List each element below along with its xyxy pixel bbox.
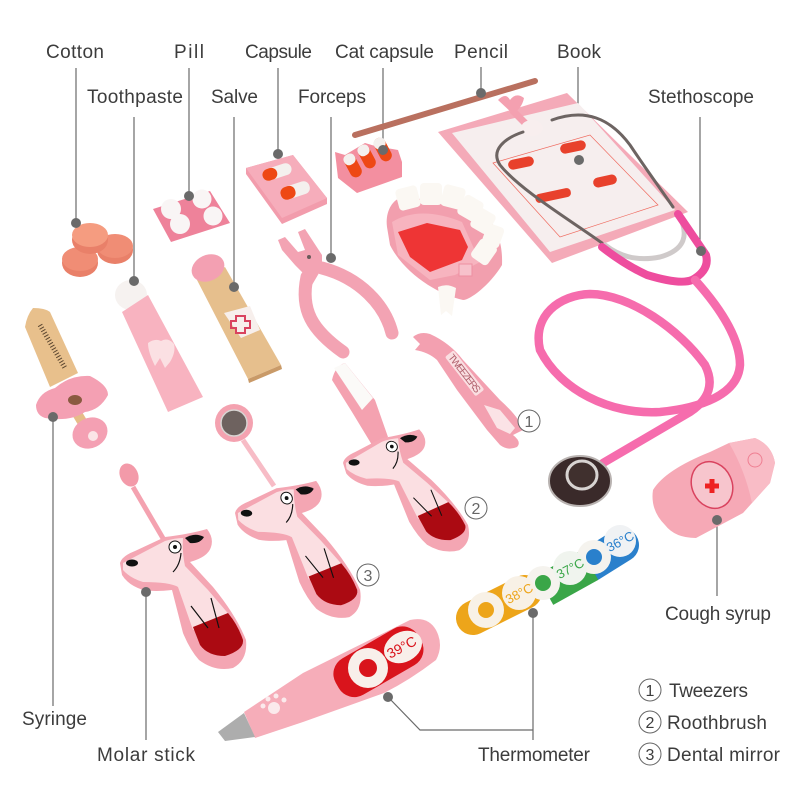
thermometer strip: 36°C (604, 528, 637, 555)
thermometer strip: 38°C (503, 580, 536, 607)
label 3 circle: 3 (364, 568, 373, 585)
forceps (278, 229, 392, 352)
syringe (25, 308, 113, 454)
label 1 circle (518, 410, 540, 432)
teeth model (387, 183, 505, 316)
label: Forceps: Forceps (298, 87, 366, 108)
thermometer: 39°C (384, 633, 419, 662)
legend: 1 (646, 683, 655, 700)
capsule (246, 155, 327, 224)
tweezers: TWEEZERS (445, 352, 483, 396)
label: Syringe: Syringe (22, 709, 87, 730)
label: Cough syrup: Cough syrup (665, 604, 771, 625)
label: Salve: Salve (211, 87, 258, 108)
label: Book: Book (557, 42, 602, 63)
label: Cotton: Cotton (46, 42, 104, 63)
legend: Tweezers (669, 681, 748, 702)
label: Capsule: Capsule (245, 42, 312, 63)
dots (48, 88, 722, 702)
legend: Roothbrush (667, 713, 767, 734)
label: Pill: Pill (174, 42, 204, 63)
thermometer strip: 37°C (554, 555, 587, 582)
stethoscope (497, 115, 740, 506)
label: Toothpaste: Toothpaste (87, 87, 183, 108)
tweezers (413, 333, 523, 449)
salve (187, 249, 282, 383)
thermometer strip (468, 525, 637, 628)
thermometer (218, 619, 440, 741)
leader lines (53, 67, 717, 740)
cat capsule (335, 136, 402, 193)
label 2 circle: 2 (472, 501, 481, 518)
dental mirror (215, 404, 362, 618)
pencil (355, 81, 535, 135)
label 1 circle: 1 (525, 414, 534, 431)
label 3 circle (357, 564, 379, 586)
label 2 circle (465, 497, 487, 519)
pill (153, 190, 230, 242)
molar stick (116, 460, 246, 669)
label: Thermometer: Thermometer (478, 745, 591, 766)
cotton (62, 223, 133, 277)
label: Cat capsule: Cat capsule (335, 42, 434, 63)
cough syrup (652, 438, 775, 538)
book clipboard (438, 93, 688, 263)
legend: Dental mirror (667, 745, 781, 766)
label: Pencil: Pencil (454, 42, 508, 63)
label: Molar stick: Molar stick (97, 745, 196, 766)
toothbrush (332, 363, 472, 556)
label: Stethoscope: Stethoscope (648, 87, 754, 108)
toothpaste (115, 280, 203, 412)
legend: 3 (646, 747, 655, 764)
legend (639, 679, 781, 766)
legend: 2 (646, 715, 655, 732)
